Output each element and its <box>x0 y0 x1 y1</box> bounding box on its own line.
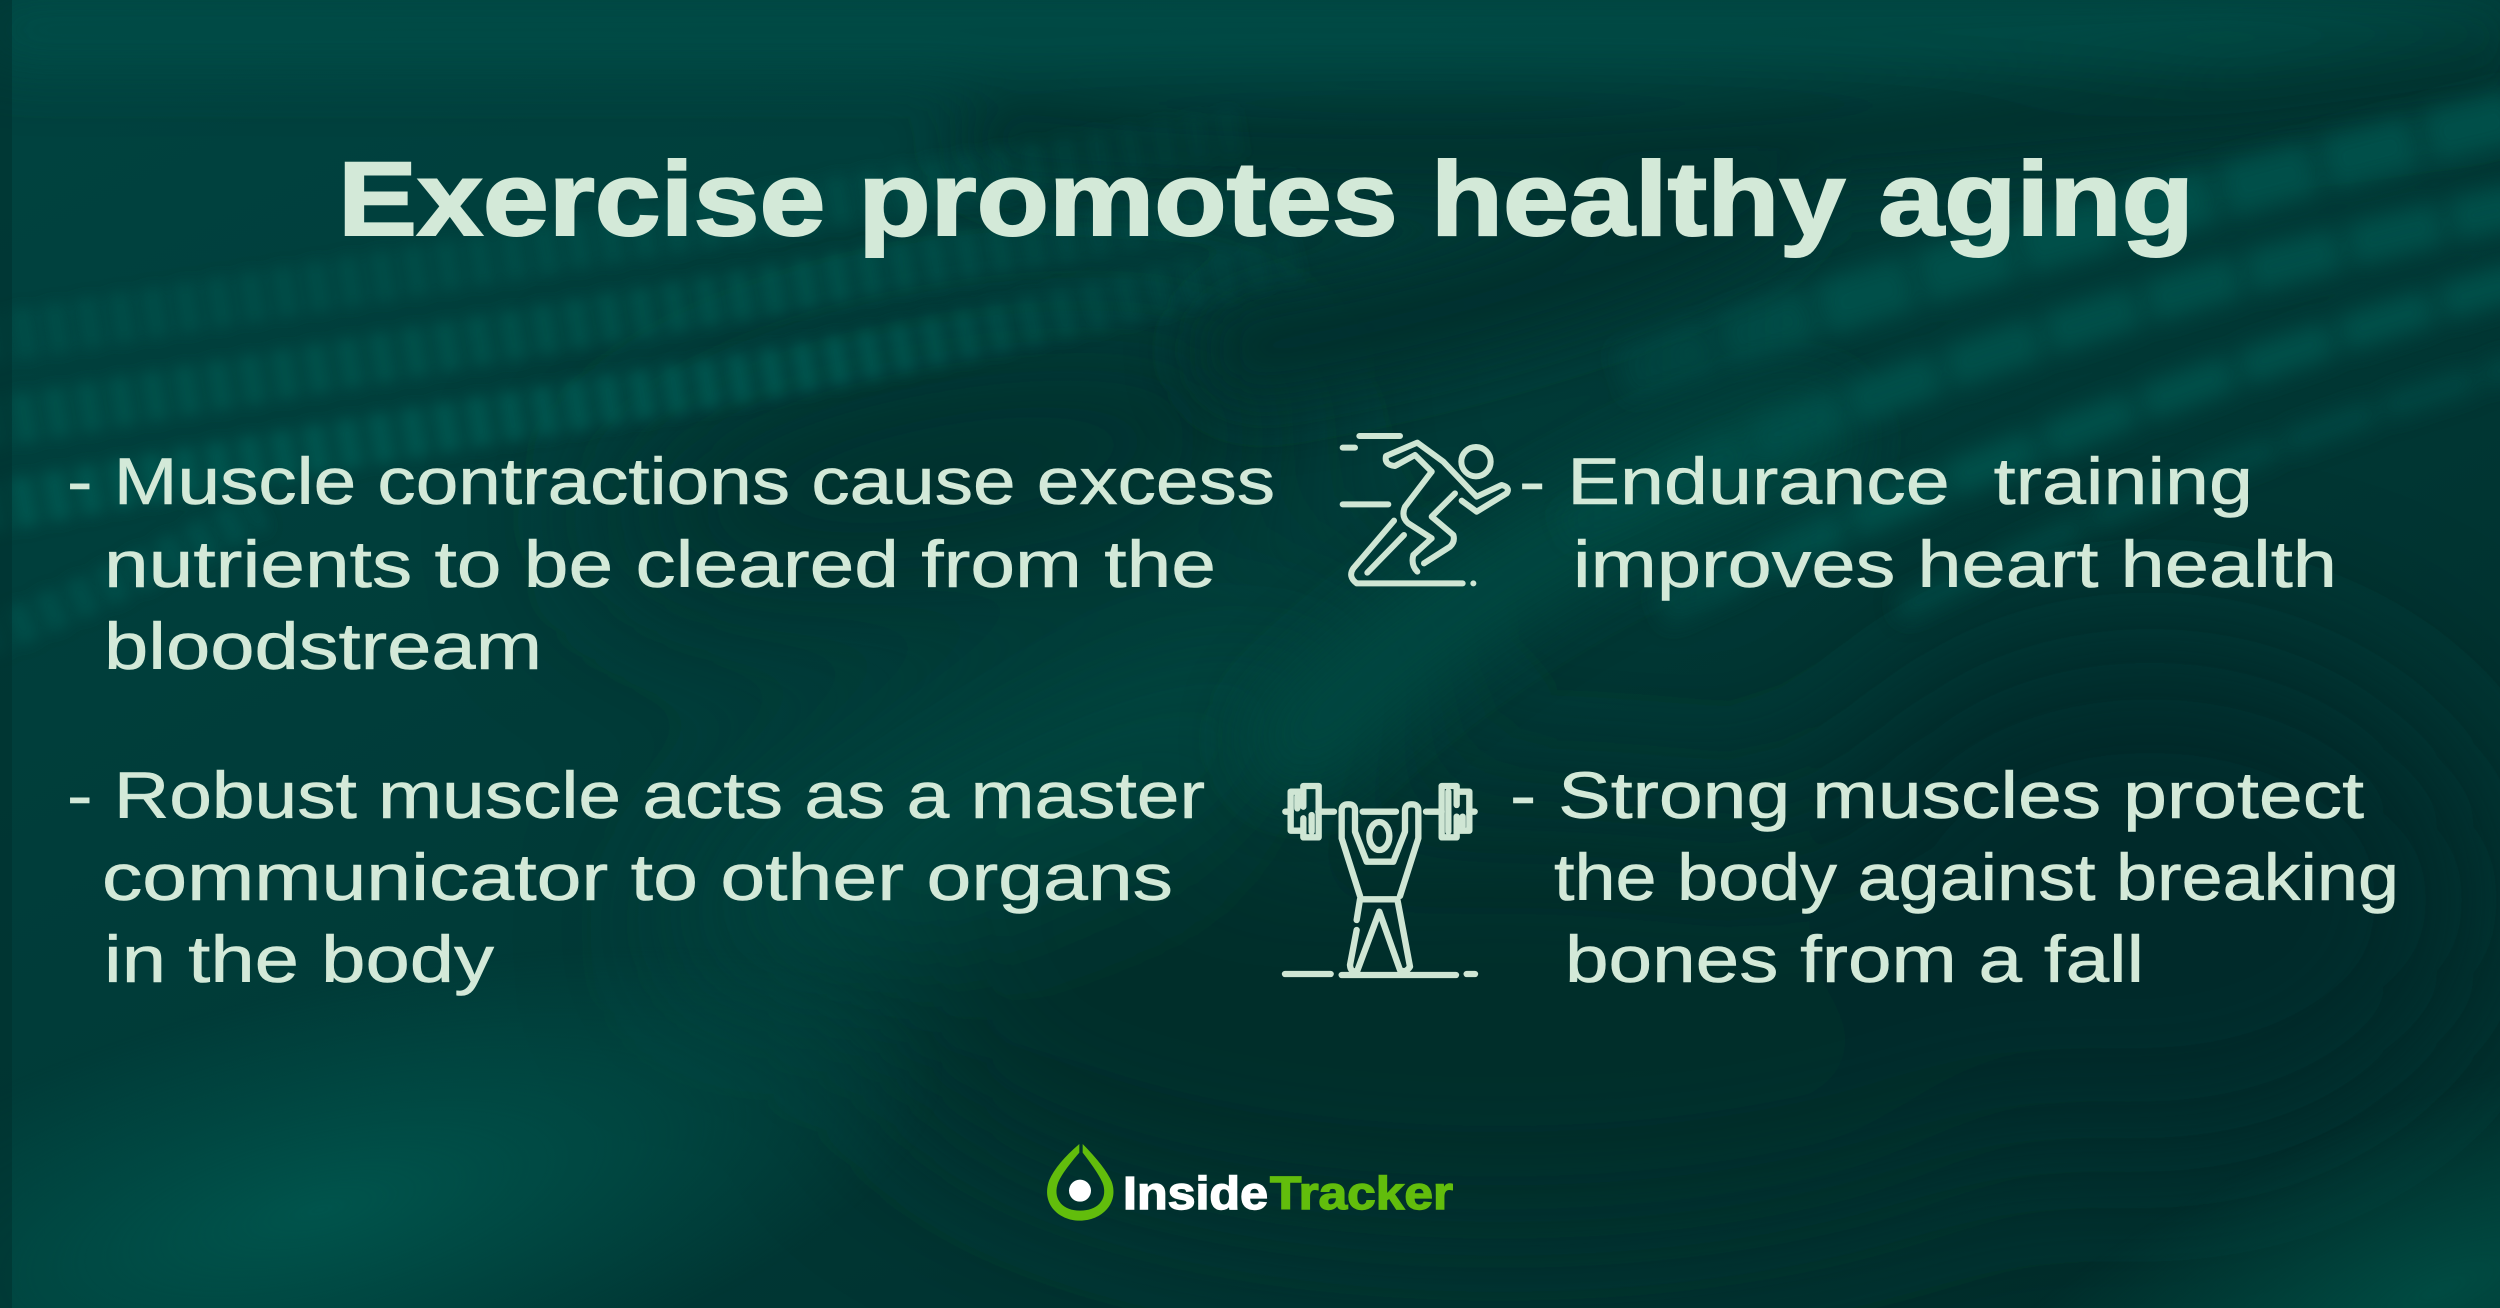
text block: nutrients cleared: bloodstream <box>104 609 542 683</box>
text block: strong muscles: - Strong muscles protect <box>1510 758 2364 832</box>
title: Exercise promotes healthy aging <box>338 141 2194 258</box>
logo: InsideTracker: Inside <box>1123 1167 1268 1219</box>
icon: weightlifter <box>1285 786 1475 975</box>
logo: InsideTracker <box>1047 1144 1453 1221</box>
text block: nutrients cleared: nutrients to be cleared from the <box>104 527 1216 601</box>
icon: logo droplet <box>1047 1144 1113 1221</box>
text block: endurance training: improves heart health <box>1573 527 2337 601</box>
text block: muscle communicator <box>67 758 1205 996</box>
logo: InsideTracker: Tracker <box>1270 1167 1453 1219</box>
text block: endurance training <box>1519 444 2337 601</box>
text block: nutrients cleared <box>67 444 1275 683</box>
text block: strong muscles: bones from a fall <box>1565 922 2144 996</box>
text block: strong muscles: the body against breaking <box>1554 840 2399 914</box>
text block: muscle communicator: communicator to other organs <box>102 840 1173 914</box>
text block: strong muscles <box>1510 758 2399 996</box>
icon: sprinting runner <box>1343 436 1508 583</box>
text block: endurance training: - Endurance training <box>1519 444 2253 518</box>
text block: nutrients cleared: - Muscle contractions cause excess <box>67 444 1275 518</box>
text block: muscle communicator: - Robust muscle acts as a master <box>67 758 1205 832</box>
text block: muscle communicator: in the body <box>104 922 494 996</box>
